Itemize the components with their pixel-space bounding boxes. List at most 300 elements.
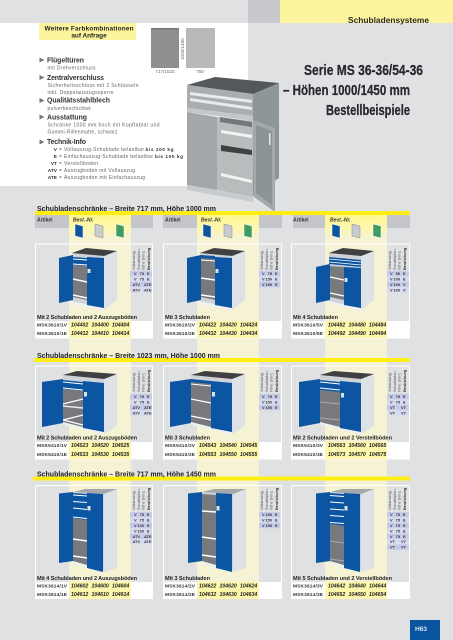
- panel: MSK3610/5: [291, 244, 410, 338]
- table header column 1: Best.-Nr.: [73, 218, 94, 224]
- feature: Technik-Info: =: [59, 175, 62, 181]
- drawer table: ATV: [132, 287, 140, 292]
- order rows: 104642: [328, 584, 345, 590]
- drawer table: ATE: [144, 282, 152, 287]
- feature: Technik-Info: Verstellboden: [64, 161, 98, 167]
- dimension swatches: [151, 28, 215, 74]
- drawer table: V: [262, 400, 265, 405]
- photo: open cabinet: [187, 77, 279, 212]
- order rows: 104535: [112, 452, 129, 458]
- order rows: MSK3610/2V: [165, 322, 196, 328]
- drawer table: 75: [396, 512, 401, 517]
- drawer table: Schubladen-: [392, 247, 397, 270]
- drawer table: höhe (mm): [396, 250, 402, 270]
- cream order-number columns: [69, 215, 387, 599]
- feature: Technik-Info: bis 200 kg: [146, 147, 174, 153]
- main title: [283, 62, 423, 119]
- drawer table: Vollauszug: [259, 251, 264, 270]
- table header column 3: [293, 215, 410, 238]
- caption: Mit 2 Schubladen und 2 Auszugsböden: [37, 436, 138, 442]
- order rows: 104632: [199, 592, 216, 598]
- drawer table: ATV: [132, 539, 140, 544]
- drawer table: V: [134, 394, 137, 399]
- drawer table: Vollauszug: [131, 491, 136, 510]
- drawer table: 75: [396, 518, 401, 523]
- drawer table: [259, 369, 280, 410]
- drawer table: E: [275, 405, 278, 410]
- drawer table: 150: [266, 512, 272, 517]
- section bar: width 717 height 1000: Schubladenschränke – Breite 717 mm, Höhe 1000 mm: [37, 206, 216, 213]
- white intro panel: [0, 23, 248, 186]
- drawer table: Bestückung: [274, 247, 279, 270]
- drawer table: [259, 247, 280, 287]
- drawer table: [130, 487, 152, 544]
- cabinet: [188, 489, 246, 573]
- table header column 2: [163, 215, 282, 238]
- drawer table: [387, 369, 409, 416]
- drawer table: Bestückung: [274, 369, 279, 392]
- drawer table: V: [134, 518, 137, 523]
- feature: Ausstattung: Schränke 1000 mm hoch mit Kopftablar und: [48, 122, 160, 128]
- drawer table: E: [403, 512, 406, 517]
- order rows: 104434: [240, 331, 257, 337]
- order rows: 104422: [199, 322, 216, 328]
- order rows: MSK5410/1V: [37, 443, 68, 449]
- order rows: 104570: [348, 452, 366, 458]
- section bar: width 717 height 1000: [35, 206, 410, 215]
- order rows: MSK5410/2E: [165, 452, 196, 458]
- feature: Flügeltüren: [40, 58, 96, 72]
- caption: Mit 3 Schubladen: [165, 576, 211, 582]
- order rows: 104644: [369, 584, 386, 590]
- drawer table: ATE: [144, 539, 152, 544]
- feature: Technik-Info: E: [54, 154, 58, 160]
- order rows: 104430: [220, 331, 237, 337]
- order rows: 104533: [71, 452, 88, 458]
- order rows: 104484: [369, 322, 386, 328]
- table header column 2: Best.-Nr.: [201, 218, 222, 224]
- feature: Zentralverschluss: Zentralverschluss: [47, 75, 104, 82]
- feature: Ausstattung: [40, 114, 160, 136]
- drawer table: höhe (mm): [140, 490, 146, 510]
- drawer table: [387, 487, 409, 550]
- drawer table: V: [390, 282, 393, 287]
- order rows: [291, 442, 410, 459]
- drawer table: Bestückung: [146, 369, 151, 392]
- drawer table: 75: [396, 523, 401, 528]
- order rows: MSK5410/1E: [37, 452, 68, 458]
- drawer table: E: [275, 277, 278, 282]
- order rows: 104560: [348, 443, 366, 449]
- drawer table: 75: [140, 400, 145, 405]
- order rows: 104480: [348, 322, 366, 328]
- order rows: 104563: [328, 443, 345, 449]
- cabinet: [316, 248, 374, 311]
- order rows: 104523: [71, 443, 88, 449]
- drawer table: Bestückung: [146, 487, 151, 510]
- drawer table: [387, 247, 409, 293]
- drawer table: V: [134, 523, 137, 528]
- drawer table: höhe (mm): [396, 490, 402, 510]
- drawer table: Vollauszug: [131, 373, 136, 392]
- drawer table: E: [275, 394, 278, 399]
- drawer table: Schubladen-: [392, 369, 397, 392]
- drawer table: V: [390, 518, 393, 523]
- order rows: 104545: [240, 443, 257, 449]
- drawer table: V: [390, 534, 393, 539]
- drawer table: 75: [268, 394, 273, 399]
- order rows: MSK3610/5V: [293, 322, 324, 328]
- order rows: 104555: [240, 452, 257, 458]
- callout: colour combinations: Weitere Farbkombinationen: [44, 26, 134, 32]
- panel: MSK5410/2: [163, 366, 282, 459]
- drawer table: E: [147, 277, 150, 282]
- drawer table: Schubladen-: [264, 369, 269, 392]
- table header column 3: Best.-Nr.: [330, 218, 351, 224]
- drawer table: [130, 369, 152, 416]
- cabinet: [59, 489, 117, 573]
- drawer table: 100: [394, 277, 400, 282]
- order rows: MSK3614/2V: [165, 584, 196, 590]
- callout: colour combinations: auf Anfrage: [71, 32, 107, 40]
- order rows: MSK3614/3E: [293, 592, 324, 598]
- section bar: width 1023 height 1000: Schubladenschränke – Breite 1023 mm, Höhe 1000 mm: [37, 353, 220, 360]
- drawer table: V: [390, 287, 393, 292]
- panel: MSK3614/1: [35, 486, 153, 599]
- drawer table: V: [390, 400, 393, 405]
- dimension swatches: 1000/1450: [180, 38, 185, 60]
- drawer table: höhe (mm): [268, 490, 274, 510]
- drawer table: V: [390, 394, 393, 399]
- panel: MSK3614/3: [291, 486, 410, 599]
- drawer table: 75: [140, 518, 145, 523]
- order rows: 104530: [92, 452, 109, 458]
- order rows: MSK3610/1V: [37, 322, 68, 328]
- drawer table: V: [390, 512, 393, 517]
- feature: Technik-Info: Auszugboden mit Einfachauszug: [64, 175, 145, 181]
- drawer table: höhe (mm): [396, 372, 402, 392]
- dimension swatches: 750: [196, 69, 204, 74]
- order rows: 104412: [71, 331, 88, 337]
- drawer table: E: [147, 512, 150, 517]
- drawer table: V: [262, 271, 265, 276]
- drawer table: 75: [396, 528, 401, 533]
- drawer table: 150: [266, 282, 272, 287]
- order rows: 104420: [220, 322, 237, 328]
- drawer table: V: [134, 512, 137, 517]
- drawer table: E: [147, 528, 150, 533]
- order rows: 104432: [199, 331, 216, 337]
- order rows: 104602: [71, 584, 88, 590]
- feature: Qualitätsstahlblech: Qualitätsstahlblech: [47, 98, 110, 104]
- feature: Technik-Info: [40, 139, 183, 181]
- drawer table: E: [403, 528, 406, 533]
- order rows: 104494: [369, 331, 386, 337]
- drawer table: E: [403, 277, 406, 282]
- feature: Technik-Info: VT: [51, 161, 57, 167]
- drawer table: VT: [390, 405, 396, 410]
- page number tab: H63: [415, 626, 427, 633]
- cabinet: [42, 371, 117, 435]
- order rows: 104543: [199, 443, 216, 449]
- drawer table: Vollauszug: [131, 251, 136, 270]
- feature: Technik-Info: =: [59, 161, 62, 167]
- feature: Technik-Info: Technik-Info: [47, 139, 86, 146]
- section bar: width 717 height 1450: [33, 472, 410, 480]
- drawer table: 75: [396, 394, 401, 399]
- drawer table: Bestückung: [274, 487, 279, 510]
- order rows: 104600: [92, 584, 109, 590]
- drawer table: VT: [401, 405, 407, 410]
- cabinet: [187, 248, 245, 311]
- drawer table: E: [147, 523, 150, 528]
- order rows: 104404: [112, 322, 129, 328]
- order rows: [35, 321, 153, 338]
- drawer table: ATV: [132, 534, 140, 539]
- panel: MSK3610/1: [35, 244, 153, 338]
- order rows: MSK5410/2V: [165, 443, 196, 449]
- drawer table: höhe (mm): [140, 372, 146, 392]
- drawer table: Vollauszug: [259, 373, 264, 392]
- feature: Zentralverschluss: Sicherheitsschloss mit 2 Schlüsseln: [48, 83, 139, 89]
- drawer table: Bestückung: [402, 487, 407, 510]
- main title: – Höhen 1000/1450 mm: [283, 82, 410, 99]
- drawer table: 75: [396, 400, 401, 405]
- drawer table: V: [134, 271, 137, 276]
- cabinet: [170, 371, 245, 435]
- drawer table: 100: [138, 528, 144, 533]
- drawer table: VT: [390, 539, 396, 544]
- order rows: 104652: [328, 592, 345, 598]
- order rows: 104565: [369, 443, 386, 449]
- order rows: 104540: [220, 443, 237, 449]
- order rows: 104614: [112, 592, 129, 598]
- drawer table: Vollauszug: [387, 491, 392, 510]
- drawer table: 150: [266, 277, 272, 282]
- order rows: 104622: [199, 584, 216, 590]
- order rows: [35, 442, 153, 459]
- drawer table: ATV: [132, 282, 140, 287]
- order rows: 104612: [71, 592, 88, 598]
- feature list: [40, 58, 183, 181]
- drawer table: E: [275, 282, 278, 287]
- drawer table: 75: [268, 271, 273, 276]
- panel: MSK5410/3: [291, 366, 410, 459]
- order rows: 104492: [328, 331, 345, 337]
- feature: Technik-Info: =: [59, 154, 62, 160]
- drawer table: E: [403, 518, 406, 523]
- order rows: [163, 321, 282, 338]
- order rows: 104640: [348, 584, 366, 590]
- order rows: MSK3614/1E: [37, 592, 68, 598]
- order rows: MSK3614/3V: [293, 584, 324, 590]
- order rows: 104414: [112, 331, 129, 337]
- order rows: 104624: [240, 584, 257, 590]
- main title: Bestellbeispiele: [326, 102, 410, 119]
- caption: Mit 4 Schubladen: [293, 315, 339, 321]
- drawer table: Vollauszug: [259, 491, 264, 510]
- drawer table: V: [262, 518, 265, 523]
- drawer table: E: [275, 271, 278, 276]
- section label: Schubladensysteme: [348, 16, 430, 25]
- feature: Technik-Info: ATE: [48, 175, 58, 181]
- drawer table: [259, 487, 280, 528]
- drawer table: V: [262, 277, 265, 282]
- order rows: 104553: [199, 452, 216, 458]
- drawer table: 75: [140, 394, 145, 399]
- order rows: MSK3610/2E: [165, 331, 196, 337]
- panel: MSK3614/2: [163, 486, 282, 599]
- order rows: 104482: [328, 322, 345, 328]
- drawer table: ATV: [132, 405, 140, 410]
- order rows: MSK3614/2E: [165, 592, 196, 598]
- feature: Technik-Info: ATV: [48, 168, 58, 174]
- order rows: 104402: [71, 322, 88, 328]
- panel: MSK3610/2: [163, 244, 282, 338]
- drawer table: V: [390, 528, 393, 533]
- drawer table: V: [134, 277, 137, 282]
- main title: Serie MS 36-36/54-36: [304, 62, 423, 79]
- order rows: 104620: [220, 584, 237, 590]
- drawer table: 75: [140, 271, 145, 276]
- drawer table: E: [275, 518, 278, 523]
- drawer table: E: [147, 400, 150, 405]
- drawer table: V: [403, 287, 406, 292]
- feature: Flügeltüren: mit Drehverschluss: [48, 66, 96, 72]
- order rows: 104650: [348, 592, 366, 598]
- order rows: 104400: [92, 322, 109, 328]
- drawer table: ATE: [144, 534, 152, 539]
- table header column 1: Artikel: [37, 218, 53, 224]
- drawer table: Schubladen-: [136, 247, 141, 270]
- panel: MSK5410/1: [35, 366, 153, 459]
- feature: Flügeltüren: Flügeltüren: [47, 58, 84, 64]
- drawer table: V: [262, 282, 265, 287]
- drawer table: V: [403, 282, 406, 287]
- drawer table: VT: [401, 545, 407, 550]
- caption: Mit 2 Schubladen und 2 Auszugsböden: [37, 315, 138, 321]
- drawer table: VT: [401, 410, 407, 415]
- drawer table: Schubladen-: [392, 487, 397, 510]
- drawer table: V: [262, 512, 265, 517]
- drawer table: E: [403, 400, 406, 405]
- table header column 1: [35, 215, 153, 238]
- section bar: width 717 height 1450: Schubladenschränke – Breite 717 mm, Höhe 1450 mm: [37, 472, 216, 478]
- dimension swatches: 717/1023: [155, 69, 175, 74]
- cabinet: [59, 248, 117, 311]
- feature: Ausstattung: Gummi-Rillenmatte, schwarz: [48, 130, 118, 136]
- drawer table: Vollauszug: [387, 251, 392, 270]
- drawer table: Bestückung: [402, 369, 407, 392]
- order rows: 104550: [220, 452, 237, 458]
- drawer table: VT: [390, 545, 396, 550]
- drawer table: VT: [390, 410, 396, 415]
- drawer table: 150: [266, 523, 272, 528]
- order rows: 104520: [92, 443, 109, 449]
- order rows: MSK3610/1E: [37, 331, 68, 337]
- caption: Mit 5 Schubladen und 2 Verstellböden: [293, 576, 393, 582]
- order rows: 104525: [112, 443, 129, 449]
- feature: Zentralverschluss: [40, 75, 139, 96]
- order rows: MSK3614/1V: [37, 584, 68, 590]
- drawer table: E: [403, 523, 406, 528]
- drawer table: 150: [266, 405, 272, 410]
- feature: Technik-Info: V: [54, 147, 58, 153]
- table header column 3: Artikel: [293, 218, 309, 224]
- drawer table: 75: [396, 534, 401, 539]
- drawer table: V: [134, 400, 137, 405]
- drawer table: ATE: [144, 405, 152, 410]
- drawer table: höhe (mm): [268, 372, 274, 392]
- drawer table: Schubladen-: [136, 487, 141, 510]
- order rows: 104604: [112, 584, 129, 590]
- order rows: [291, 321, 410, 338]
- feature: Technik-Info: bis 100 kg: [155, 154, 183, 160]
- feature: Ausstattung: Ausstattung: [47, 114, 87, 122]
- top band grey block: [248, 0, 280, 23]
- section bar: width 1023 height 1000: [34, 353, 410, 362]
- cabinet: [316, 489, 374, 573]
- feature: Technik-Info: Vollauszug-Schublade belastbar: [64, 147, 144, 153]
- drawer table: 50: [396, 271, 400, 276]
- drawer table: V: [262, 394, 265, 399]
- drawer table: 100: [394, 282, 400, 287]
- drawer table: 100: [394, 287, 400, 292]
- order rows: [163, 582, 282, 599]
- drawer table: ATV: [132, 410, 140, 415]
- order rows: [163, 442, 282, 459]
- drawer table: E: [147, 271, 150, 276]
- drawer table: E: [147, 394, 150, 399]
- feature: Technik-Info: =: [59, 147, 62, 153]
- order rows: 104424: [240, 322, 257, 328]
- order rows: 104410: [92, 331, 109, 337]
- feature: Technik-Info: Auszugboden mit Vollauszug: [64, 168, 135, 174]
- drawer table: ATE: [144, 287, 152, 292]
- feature: Technik-Info: Einfachauszug-Schublade belastbar: [64, 154, 153, 160]
- drawer table: Schubladen-: [264, 487, 269, 510]
- drawer table: E: [275, 523, 278, 528]
- drawer table: ATE: [144, 410, 152, 415]
- order rows: 104573: [328, 452, 345, 458]
- order rows: MSK5410/3V: [293, 443, 324, 449]
- caption: Mit 4 Schubladen und 2 Auszugsböden: [37, 576, 138, 582]
- drawer table: E: [275, 512, 278, 517]
- drawer table: V: [134, 528, 137, 533]
- order rows: 104490: [348, 331, 366, 337]
- drawer table: V: [390, 271, 393, 276]
- drawer table: E: [403, 271, 406, 276]
- page number tab: [410, 620, 440, 640]
- drawer table: V: [390, 523, 393, 528]
- drawer table: VT: [401, 539, 407, 544]
- callout: colour combinations: [39, 23, 136, 40]
- drawer table: V: [262, 523, 265, 528]
- drawer table: V: [262, 405, 265, 410]
- cabinet: [299, 371, 374, 435]
- order rows: 104654: [369, 592, 386, 598]
- drawer table: [130, 247, 152, 293]
- caption: Mit 3 Schubladen: [165, 315, 211, 321]
- drawer table: 150: [266, 400, 272, 405]
- drawer table: höhe (mm): [140, 250, 146, 270]
- order rows: 104575: [369, 452, 386, 458]
- order rows: 104634: [240, 592, 257, 598]
- caption: Mit 3 Schubladen: [165, 436, 211, 442]
- drawer table: Bestückung: [402, 247, 407, 270]
- drawer table: E: [403, 394, 406, 399]
- feature: Qualitätsstahlblech: [40, 98, 110, 112]
